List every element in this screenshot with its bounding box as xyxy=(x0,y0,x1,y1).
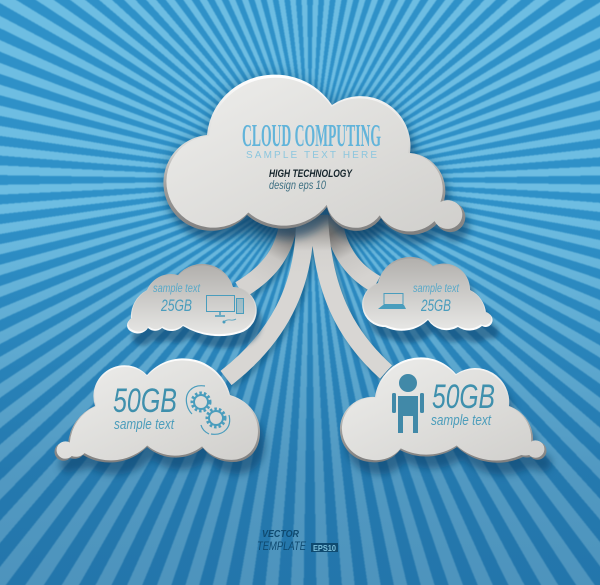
cloud: main Cloud Computing xyxy=(163,75,469,245)
cloud: 50GB gears xyxy=(54,358,265,475)
connector bands xyxy=(226,203,395,382)
cloud: main Cloud Computing: CLOUD COMPUTING xyxy=(242,117,381,153)
band: to left large cloud xyxy=(226,215,305,378)
label: 25GB: 25GB xyxy=(160,296,192,315)
band: to right small cloud xyxy=(333,215,376,284)
subtitle: SAMPLE TEXT HERE xyxy=(246,150,377,161)
footer: vector template: EPS10 xyxy=(313,544,337,553)
icon: desktop computer xyxy=(206,296,244,324)
footer: vector template xyxy=(257,529,338,553)
label: sample text: sample text xyxy=(153,281,201,295)
label: sample text: sample text xyxy=(114,416,175,433)
label: 50GB: 50GB xyxy=(113,382,177,420)
shadow under top cloud xyxy=(235,203,395,247)
icon: laptop xyxy=(378,294,406,309)
cloud: 25GB computer xyxy=(127,264,262,348)
band: to left small cloud xyxy=(240,215,289,290)
icon: person xyxy=(392,374,424,433)
footer: vector template: TEMPLATE xyxy=(257,539,307,553)
label: sample text: sample text xyxy=(413,281,459,295)
band: to right large cloud xyxy=(319,215,386,372)
label: 25GB: 25GB xyxy=(420,296,451,315)
footer: vector template: VECTOR xyxy=(262,529,300,540)
text: design eps 10: design eps 10 xyxy=(269,180,326,192)
cloud: 50GB person xyxy=(340,357,552,475)
label: 50GB: 50GB xyxy=(432,378,495,416)
heading: high technology: HIGH TECHNOLOGY xyxy=(269,168,353,180)
label: sample text: sample text xyxy=(431,412,492,429)
cloud: 25GB laptop xyxy=(362,257,499,343)
icon: gears xyxy=(186,386,230,434)
